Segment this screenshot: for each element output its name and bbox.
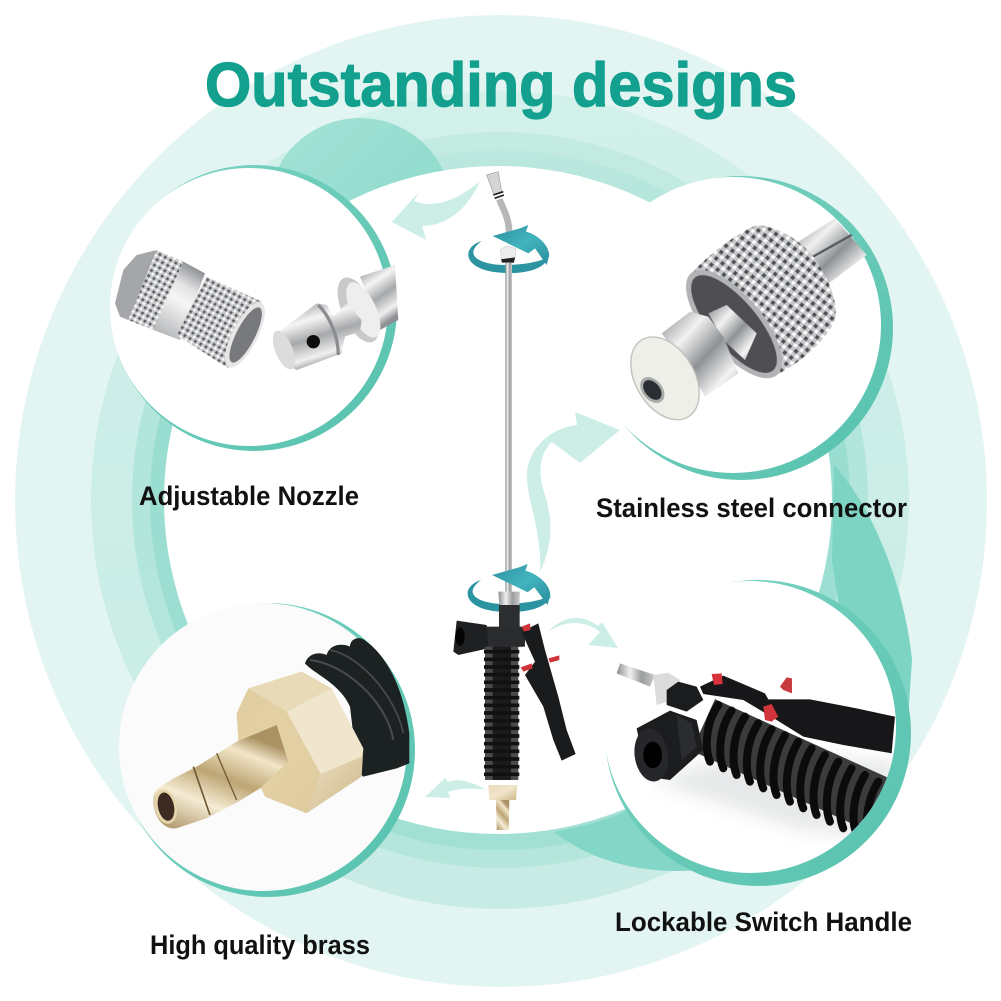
teal ring — [121, 603, 415, 897]
fin stack — [485, 647, 518, 780]
metal collar — [498, 592, 520, 605]
red catches — [712, 673, 723, 685]
spray gun — [453, 592, 576, 830]
teal ring — [605, 580, 911, 886]
rotate arrow lower — [492, 564, 550, 605]
curved tube — [499, 199, 509, 237]
main shaft — [505, 263, 512, 596]
neck — [499, 605, 520, 628]
panel: high quality brass — [119, 603, 415, 897]
hose end cap — [637, 711, 703, 780]
steel tube — [798, 218, 867, 285]
knurled nozzle cap — [115, 250, 273, 373]
knurled collar — [692, 225, 836, 375]
brass nut — [488, 785, 517, 800]
panel: adjustable nozzle — [110, 165, 398, 451]
white lens — [604, 581, 896, 873]
white lens — [585, 177, 881, 473]
panel: lockable switch handle — [604, 580, 911, 886]
bore — [635, 372, 669, 408]
arrow: to stainless connector — [527, 412, 620, 572]
black neck — [667, 682, 703, 712]
nozzle head — [487, 172, 502, 195]
panel: stainless connector — [585, 176, 893, 480]
rotate ring top — [468, 241, 548, 273]
front red catch — [763, 704, 778, 722]
connector neck — [708, 305, 757, 360]
white lens — [110, 168, 388, 446]
black rubber gasket — [305, 638, 409, 777]
title: Outstanding designs — [205, 51, 797, 120]
collar interior — [669, 255, 799, 393]
arrow: to adjustable nozzle — [392, 181, 480, 240]
cross body — [487, 627, 525, 648]
connector body — [662, 312, 738, 397]
metal tube — [617, 663, 655, 687]
barb stem — [153, 725, 288, 828]
teal ring — [111, 165, 397, 451]
label: lockable switch handle: Lockable Switch Handle — [615, 907, 912, 937]
teal ring — [589, 176, 893, 480]
product: spray wand — [453, 172, 576, 830]
label: adjustable nozzle: Adjustable Nozzle — [139, 481, 359, 511]
floor shadow — [650, 760, 900, 835]
white lens — [119, 603, 407, 891]
ribbed hose body — [703, 725, 883, 807]
arrow: to lockable handle — [548, 618, 618, 648]
head — [453, 621, 488, 655]
rotate arrow top — [493, 225, 549, 265]
threaded connector tip — [268, 265, 398, 372]
barb bore — [151, 787, 180, 826]
label: stainless steel connector: Stainless steel connector — [596, 493, 907, 523]
arrow: to brass fitting — [425, 778, 486, 798]
white knob — [500, 246, 516, 259]
trigger handle — [700, 676, 895, 753]
trigger lever — [522, 623, 576, 761]
rotate ring lower — [468, 580, 551, 612]
hose ribs — [707, 705, 878, 840]
hex nut — [237, 672, 363, 813]
red catches — [522, 623, 531, 632]
silver collar — [653, 673, 680, 705]
white seal — [617, 325, 713, 432]
barb — [496, 800, 509, 830]
label: high quality brass: High quality brass — [150, 930, 370, 960]
